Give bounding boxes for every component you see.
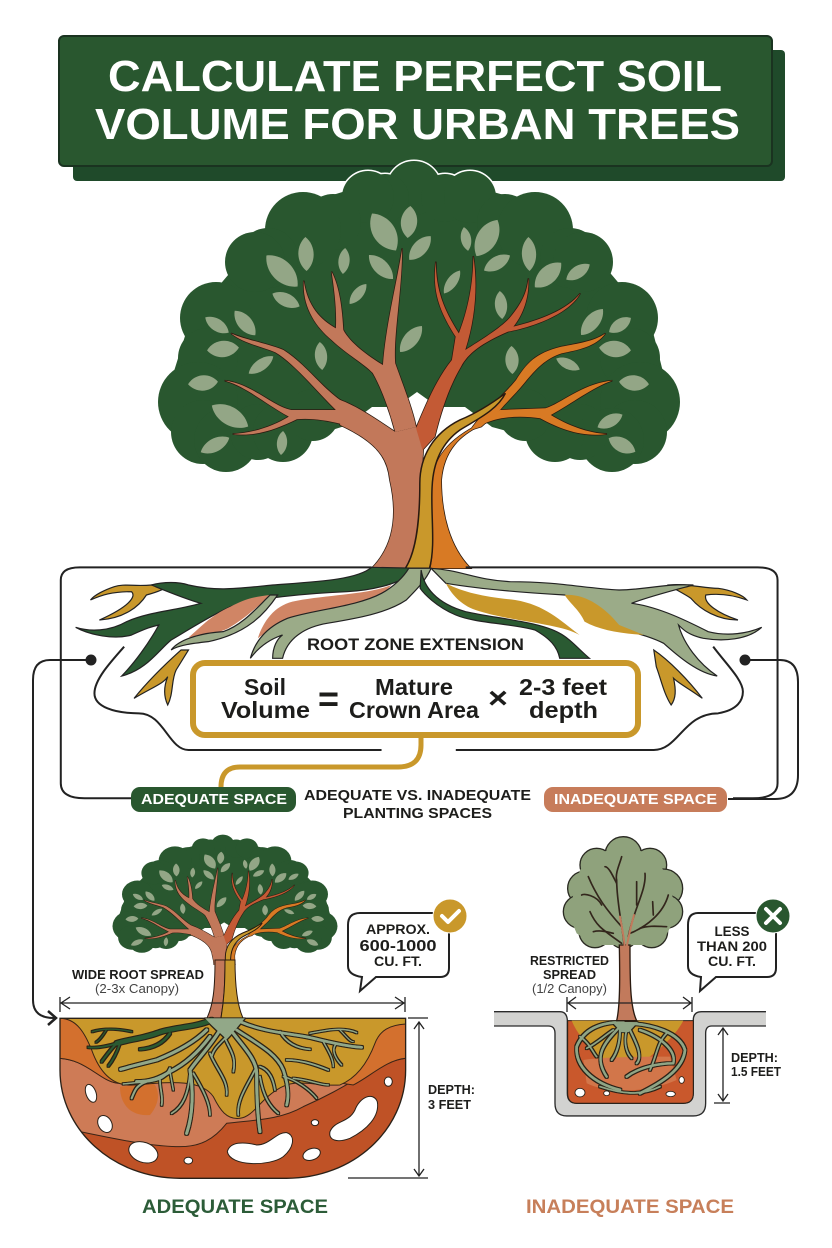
adequate volume callout: APPROX.	[366, 922, 430, 937]
adequate volume callout: 600-1000	[360, 938, 437, 955]
formula box: Volume	[221, 697, 310, 723]
inadequate volume callout: THAN 200	[697, 939, 767, 954]
pill: inadequate space: INADEQUATE SPACE	[554, 792, 717, 808]
restricted spread dimension	[530, 954, 692, 1012]
title banner	[59, 36, 785, 181]
restricted spread dimension: RESTRICTED	[530, 954, 609, 968]
inadequate depth dimension	[714, 1028, 781, 1103]
inadequate volume callout	[688, 899, 790, 991]
adequate depth dimension	[348, 1018, 475, 1178]
formula box: 2-3 feet	[519, 674, 607, 700]
pill: inadequate space	[544, 787, 727, 812]
subheading: PLANTING SPACES	[343, 805, 492, 822]
restricted spread dimension: SPREAD	[543, 968, 596, 982]
adequate root system	[88, 1019, 362, 1133]
left roots	[76, 567, 431, 705]
main tree illustration	[158, 161, 680, 568]
wide root spread dimension: (2-3x Canopy)	[95, 982, 179, 996]
formula box: ×	[488, 682, 508, 715]
root zone outer frame	[61, 567, 778, 798]
adequate depth dimension: 3 FEET	[428, 1098, 471, 1112]
adequate volume callout: CU. FT.	[374, 954, 422, 969]
small sage tree	[563, 837, 683, 1021]
root zone label: ROOT ZONE EXTENSION	[307, 635, 524, 654]
pill: adequate space: ADEQUATE SPACE	[141, 792, 287, 808]
icon: x badge	[756, 899, 790, 933]
formula box: =	[318, 678, 339, 719]
pill: adequate space	[131, 787, 296, 812]
right roots	[420, 568, 762, 705]
restricted soil	[568, 1021, 693, 1103]
adequate scene soil cross-section	[53, 1018, 406, 1178]
soil air pockets	[83, 1077, 392, 1167]
icon: check badge	[433, 899, 467, 933]
tangled root system	[577, 1022, 685, 1093]
subheading: ADEQUATE VS. INADEQUATE	[304, 787, 531, 804]
formula box	[193, 663, 638, 735]
title banner: VOLUME FOR URBAN TREES	[95, 101, 740, 149]
formula box: Mature	[375, 674, 453, 700]
inadequate volume callout: CU. FT.	[708, 954, 756, 969]
formula connector line	[221, 737, 421, 787]
formula box: Crown Area	[349, 697, 479, 723]
left connector arrow	[33, 656, 96, 1025]
inadequate scene	[494, 837, 766, 1116]
title banner: CALCULATE PERFECT SOIL	[108, 53, 722, 101]
formula box: Soil	[244, 674, 286, 700]
wide root spread dimension	[60, 968, 405, 1012]
inadequate space label: INADEQUATE SPACE	[526, 1197, 734, 1218]
subheading	[304, 787, 531, 822]
restricted spread dimension: (1/2 Canopy)	[532, 982, 607, 996]
adequate space label: ADEQUATE SPACE	[142, 1197, 328, 1218]
inadequate depth dimension: DEPTH:	[731, 1051, 778, 1065]
formula box: depth	[529, 697, 598, 723]
inadequate depth dimension: 1.5 FEET	[731, 1065, 781, 1079]
wide root spread dimension: WIDE ROOT SPREAD	[72, 968, 204, 982]
root zone diagram	[61, 567, 778, 798]
inadequate volume callout: LESS	[714, 924, 750, 939]
concrete planter	[494, 1012, 766, 1116]
adequate depth dimension: DEPTH:	[428, 1083, 475, 1097]
adequate volume callout	[348, 899, 467, 991]
right connector	[728, 656, 798, 799]
adequate scene tree	[112, 835, 337, 1018]
root zone inner outline	[94, 647, 743, 750]
